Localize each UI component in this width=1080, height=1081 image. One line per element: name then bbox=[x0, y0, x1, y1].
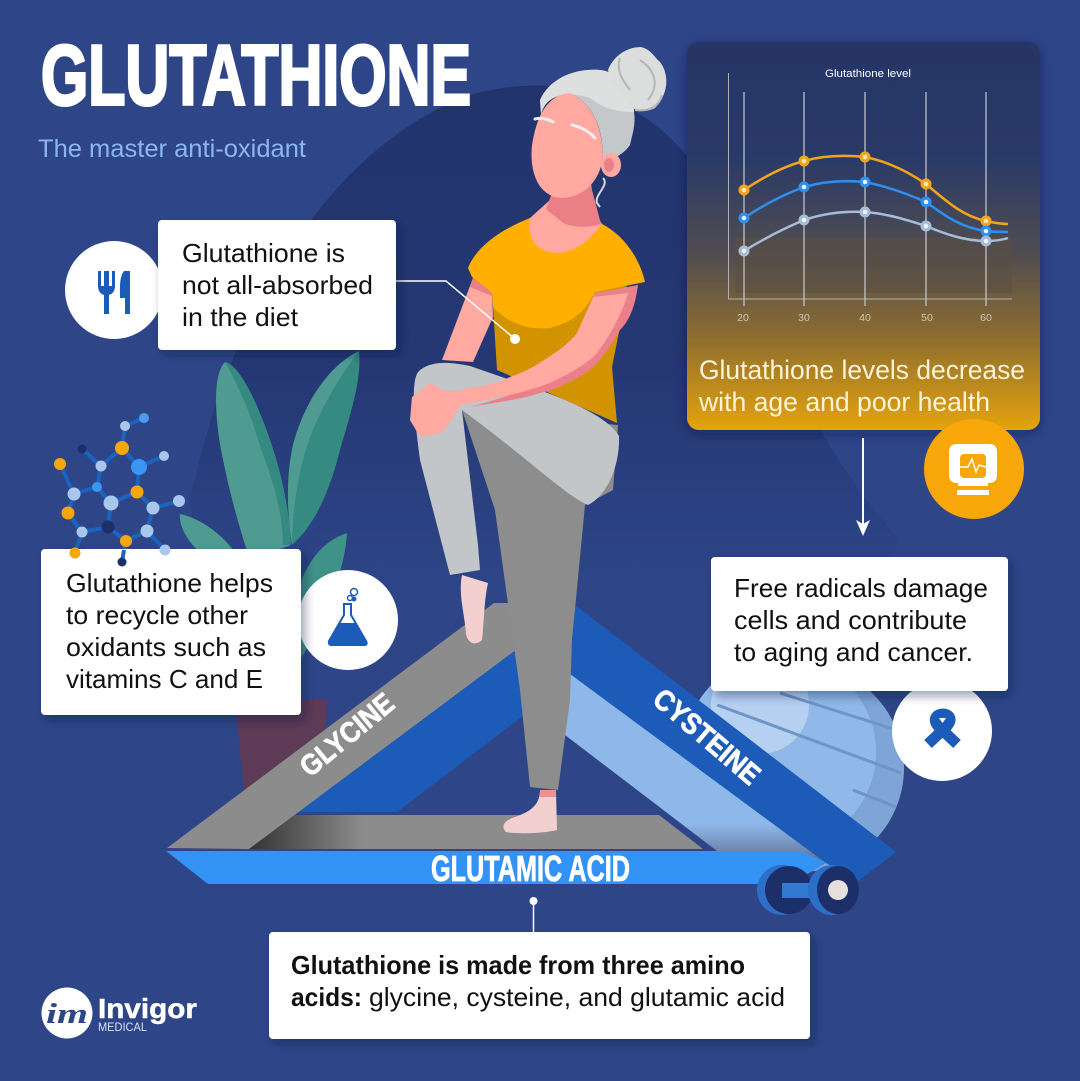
icon: fork and knife bbox=[65, 241, 163, 339]
sleeve shadow bbox=[594, 285, 638, 297]
ear bbox=[601, 153, 621, 177]
card: free radicals: to aging and cancer. bbox=[734, 637, 973, 667]
dumbbell bbox=[757, 865, 859, 915]
chest bbox=[530, 190, 602, 253]
triangle of amino acids bbox=[166, 603, 896, 889]
card: recycle: vitamins C and E bbox=[66, 664, 263, 694]
card: amino acids: Glutathione is made from three amino bbox=[291, 950, 745, 980]
label cysteine: CYSTEINE bbox=[646, 683, 766, 792]
card: diet: Glutathione is bbox=[182, 238, 345, 268]
chart axes bbox=[728, 73, 1012, 299]
molecule nodes over card bbox=[70, 544, 170, 566]
thigh and calf bbox=[414, 363, 619, 575]
card: free radicals bbox=[711, 557, 1008, 691]
title: GLUTATHIONE bbox=[41, 28, 471, 124]
light line bbox=[738, 206, 1008, 256]
chart title: Glutathione level bbox=[825, 68, 911, 80]
face bbox=[532, 93, 603, 198]
axis labels: 30 bbox=[798, 312, 810, 324]
icon: ribbon bbox=[892, 681, 992, 781]
axis labels bbox=[737, 312, 992, 324]
arrow down bbox=[856, 438, 870, 536]
axis labels: 60 bbox=[980, 312, 992, 324]
front arm and hand bbox=[410, 287, 630, 437]
hair bbox=[540, 70, 635, 160]
axis labels: 50 bbox=[921, 312, 933, 324]
lower shirt bbox=[493, 283, 627, 423]
card: diet: not all-absorbed bbox=[182, 270, 373, 300]
card: free radicals: Free radicals damage bbox=[734, 573, 988, 603]
raised foot bbox=[461, 575, 488, 643]
chart panel bbox=[687, 42, 1040, 430]
plant bbox=[180, 351, 359, 800]
callout line to glutamic acid bbox=[530, 897, 538, 932]
chart caption: with age and poor health bbox=[698, 387, 990, 417]
card: diet bbox=[158, 220, 396, 350]
glycine band bbox=[167, 603, 560, 849]
card: amino acids: glycine, cysteine, and glutamic acid bbox=[369, 982, 785, 1012]
light blue band bbox=[565, 670, 826, 863]
card: recycle bbox=[41, 549, 301, 715]
chart caption bbox=[698, 355, 1025, 417]
card: diet: in the diet bbox=[182, 302, 299, 332]
leaf left bbox=[216, 362, 291, 560]
card: amino acids: acids: bbox=[291, 982, 362, 1012]
standing foot bbox=[503, 790, 557, 833]
icon: flask bbox=[298, 570, 398, 670]
background dark blob bbox=[190, 85, 900, 800]
label glutamic acid: GLUTAMIC ACID bbox=[431, 848, 630, 889]
upper shirt bbox=[468, 218, 645, 328]
card: recycle: to recycle other bbox=[66, 600, 248, 630]
axis labels: 40 bbox=[859, 312, 871, 324]
woman figure bbox=[410, 47, 666, 833]
label glycine: GLYCINE bbox=[294, 687, 401, 783]
logo: im bbox=[46, 999, 88, 1030]
subtitle: The master anti-oxidant bbox=[38, 135, 306, 163]
chart caption: Glutathione levels decrease bbox=[699, 355, 1025, 385]
molecule bbox=[54, 413, 185, 562]
leaf right bbox=[288, 351, 359, 545]
neck bbox=[546, 175, 601, 227]
icon: monitor bbox=[924, 419, 1024, 519]
exercise ball bbox=[699, 686, 904, 872]
blue line bbox=[738, 176, 1008, 236]
card: recycle: oxidants such as bbox=[66, 632, 266, 662]
callout line to shirt bbox=[396, 281, 520, 344]
bottom grey band bbox=[249, 815, 703, 849]
standing leg bbox=[462, 410, 618, 790]
blue inner band bbox=[298, 645, 528, 812]
arm shadow bbox=[470, 285, 638, 407]
card: recycle: Glutathione helps bbox=[66, 568, 273, 598]
orange line bbox=[738, 152, 1008, 226]
logo: MEDICAL bbox=[98, 1020, 147, 1034]
logo bbox=[42, 988, 197, 1038]
logo: Invigor bbox=[98, 993, 197, 1024]
card: amino acids bbox=[269, 932, 810, 1039]
glutamic acid band bbox=[166, 851, 826, 884]
eyebrows bbox=[535, 118, 595, 138]
pot bbox=[235, 700, 328, 800]
back arm bbox=[442, 278, 493, 362]
leaf low right bbox=[295, 533, 347, 660]
axis labels: 20 bbox=[737, 312, 749, 324]
cysteine band bbox=[570, 605, 896, 881]
leaf low left bbox=[180, 514, 240, 570]
hair bun bbox=[608, 47, 666, 111]
card: free radicals: cells and contribute bbox=[734, 605, 967, 635]
hair curl bbox=[597, 178, 605, 207]
